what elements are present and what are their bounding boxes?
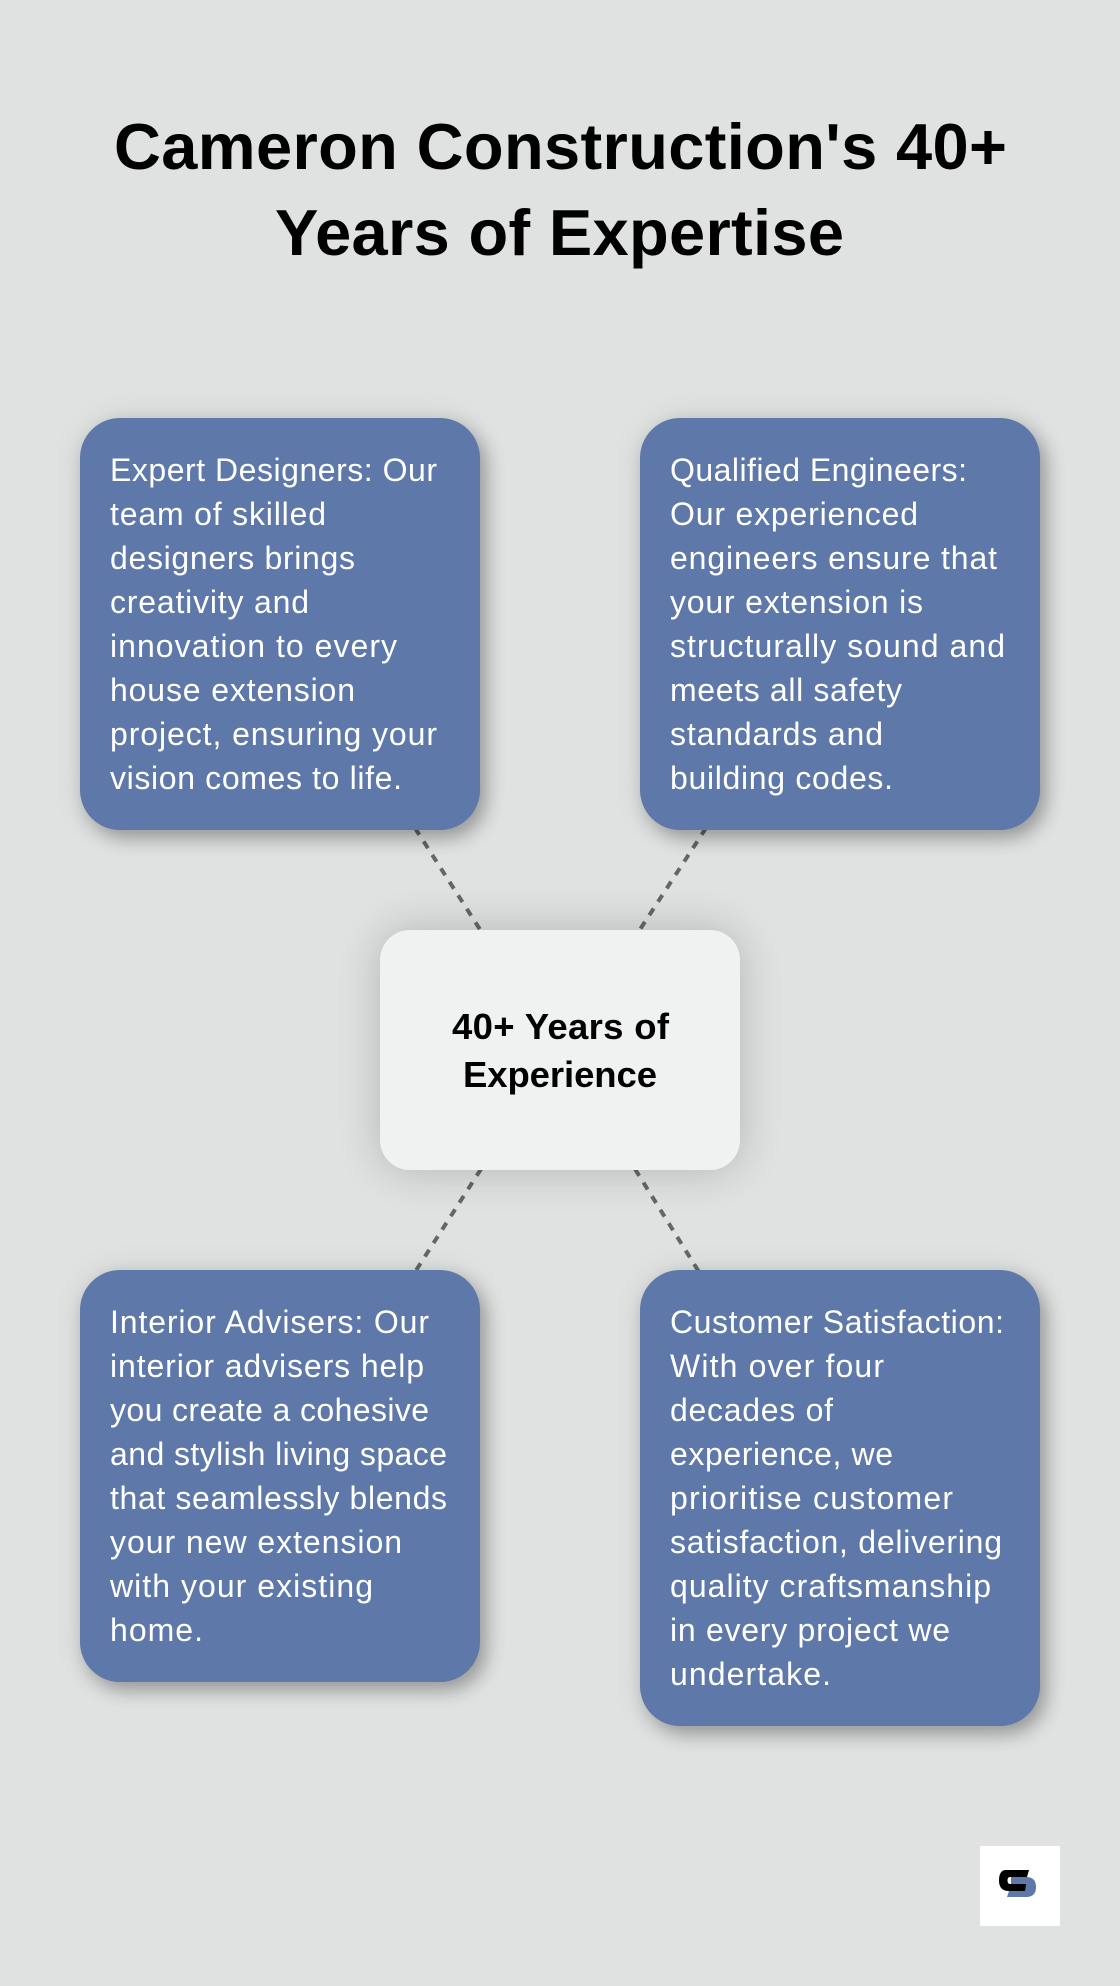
panel: interior advisers: interior advisers help: [110, 1348, 424, 1384]
panel: customer satisfaction: With over four: [670, 1348, 884, 1384]
panel: customer satisfaction: satisfaction, delivering: [670, 1524, 1002, 1560]
panel: customer satisfaction: in every project we: [670, 1612, 950, 1648]
panel: expert designers: vision comes to life.: [110, 760, 402, 796]
panel: interior advisers: [80, 1270, 480, 1682]
title: Cameron Construction's 40+: [114, 110, 1007, 183]
panel: qualified engineers: Qualified Engineers:: [670, 452, 967, 488]
title: Years of Expertise: [275, 196, 844, 269]
panel: interior advisers: with your existing: [109, 1568, 373, 1604]
panel: expert designers: Expert Designers: Our: [110, 452, 437, 488]
panel: qualified engineers: structurally sound and: [670, 628, 1005, 664]
panel: customer satisfaction: undertake.: [670, 1656, 831, 1692]
panel: qualified engineers: your extension is: [670, 584, 923, 620]
panel: customer satisfaction: prioritise customer: [670, 1480, 953, 1516]
panel: center experience: Experience: [463, 1054, 657, 1095]
panel: interior advisers: Interior Advisers: Our: [110, 1304, 429, 1340]
panel: qualified engineers: meets all safety: [670, 672, 902, 708]
panel: qualified engineers: Our experienced: [670, 496, 918, 532]
panel: interior advisers: you create a cohesive: [110, 1392, 429, 1428]
panel: expert designers: creativity and: [110, 584, 309, 620]
panel: customer satisfaction: [640, 1270, 1040, 1726]
panel: expert designers: innovation to every: [110, 628, 397, 664]
title: [114, 110, 1007, 269]
panel: qualified engineers: engineers ensure that: [670, 540, 997, 576]
panel: expert designers: team of skilled: [110, 496, 326, 532]
panel: expert designers: designers brings: [110, 540, 355, 576]
panel: expert designers: [80, 418, 480, 830]
panel: center experience: 40+ Years of: [452, 1006, 670, 1047]
panel: expert designers: project, ensuring your: [110, 716, 437, 752]
panel: interior advisers: your new extension: [110, 1524, 402, 1560]
panel: customer satisfaction: decades of: [670, 1392, 833, 1428]
panel: customer satisfaction: Customer Satisfaction:: [670, 1304, 1004, 1340]
panel: center experience: [380, 930, 740, 1170]
icon: logo: [980, 1846, 1060, 1926]
panel: qualified engineers: [640, 418, 1040, 830]
panel: customer satisfaction: quality craftsmanship: [670, 1568, 991, 1604]
panel: expert designers: house extension: [110, 672, 355, 708]
panel: qualified engineers: standards and: [670, 716, 883, 752]
panel: customer satisfaction: experience, we: [670, 1436, 893, 1472]
panel: qualified engineers: building codes.: [670, 760, 893, 796]
panel: interior advisers: home.: [110, 1612, 203, 1648]
panel: interior advisers: and stylish living space: [110, 1436, 447, 1472]
panel: interior advisers: that seamlessly blends: [110, 1480, 447, 1516]
